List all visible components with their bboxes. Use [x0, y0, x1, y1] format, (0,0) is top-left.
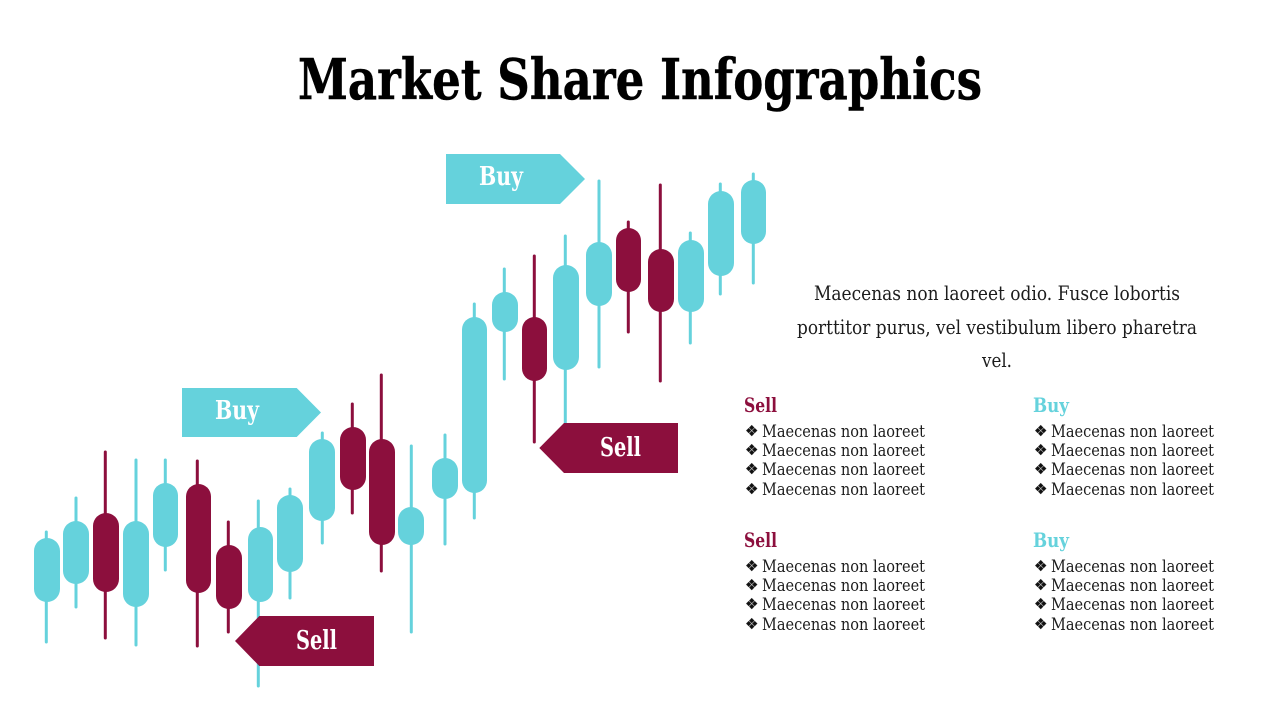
description paragraph	[797, 282, 1197, 372]
list: buy top	[1033, 393, 1214, 500]
list: sell top: Maecenas non laoreet	[762, 460, 925, 480]
description paragraph: vel.	[981, 349, 1012, 372]
candle 16	[492, 269, 518, 379]
list: sell top: Maecenas non laoreet	[762, 441, 925, 461]
candle 18	[553, 236, 579, 430]
list: sell bottom: Maecenas non laoreet	[762, 595, 925, 615]
list: buy bottom: ❖	[1034, 615, 1047, 633]
list: buy bottom	[1033, 528, 1214, 635]
candle 24	[741, 174, 766, 283]
list: buy top: Maecenas non laoreet	[1051, 460, 1214, 480]
candle 10	[309, 433, 335, 543]
list: buy bottom: Maecenas non laoreet	[1051, 557, 1214, 577]
candle 14	[432, 435, 458, 544]
candle 4	[123, 460, 149, 645]
list: buy bottom: ❖	[1034, 557, 1047, 575]
list: buy top: Maecenas non laoreet	[1051, 480, 1214, 500]
candlestick chart	[34, 174, 766, 686]
candle 12	[369, 375, 395, 571]
list: sell bottom	[744, 528, 925, 635]
list: buy bottom: Maecenas non laoreet	[1051, 615, 1214, 635]
description paragraph: Maecenas non laoreet odio. Fusce lobortis	[814, 282, 1180, 305]
list: buy top: Buy	[1033, 393, 1070, 417]
arrow: sell upper: Sell	[600, 433, 641, 463]
arrow: sell lower: Sell	[296, 626, 337, 656]
list: sell bottom: ❖	[745, 595, 758, 613]
list: buy top: Maecenas non laoreet	[1051, 441, 1214, 461]
list: sell top: Sell	[744, 393, 777, 417]
list: sell top: Maecenas non laoreet	[762, 480, 925, 500]
list: sell bottom: Maecenas non laoreet	[762, 557, 925, 577]
candle 6	[186, 461, 211, 646]
list: buy top: ❖	[1034, 422, 1047, 440]
candle 7	[216, 522, 242, 632]
list: buy top: ❖	[1034, 460, 1047, 478]
list: sell top: ❖	[745, 441, 758, 459]
candle 15	[462, 304, 487, 518]
candle 3	[93, 452, 119, 638]
arrow: buy lower: Buy	[215, 396, 260, 426]
title: Market Share Infographics	[298, 47, 982, 113]
list: sell top: ❖	[745, 480, 758, 498]
arrow: sell upper	[539, 423, 678, 473]
candle 2	[63, 498, 89, 607]
list: buy bottom: Maecenas non laoreet	[1051, 576, 1214, 596]
list: buy bottom: ❖	[1034, 595, 1047, 613]
arrow: buy lower	[182, 388, 321, 437]
list: sell bottom: ❖	[745, 557, 758, 575]
candle 5	[153, 460, 178, 570]
list: buy bottom: Buy	[1033, 528, 1070, 552]
candle 22	[678, 233, 704, 343]
list: buy bottom: Maecenas non laoreet	[1051, 595, 1214, 615]
candle 8	[248, 501, 273, 686]
candle 23	[708, 184, 734, 294]
arrow: buy upper	[446, 154, 585, 204]
candle 9	[277, 489, 303, 598]
candle 13	[398, 446, 424, 632]
list: sell top: ❖	[745, 460, 758, 478]
arrow: buy upper: Buy	[479, 162, 524, 192]
candle 21	[648, 185, 674, 381]
list: sell top: ❖	[745, 422, 758, 440]
list: sell bottom: Maecenas non laoreet	[762, 576, 925, 596]
list: buy top: ❖	[1034, 480, 1047, 498]
candle 17	[522, 256, 547, 442]
candle 19	[586, 181, 612, 367]
arrow: sell lower	[235, 616, 374, 666]
list: sell top	[744, 393, 925, 500]
candle 11	[340, 404, 366, 513]
list: sell bottom: ❖	[745, 615, 758, 633]
description paragraph: porttitor purus, vel vestibulum libero pharetra	[797, 316, 1197, 339]
list: buy bottom: ❖	[1034, 576, 1047, 594]
list: sell bottom: Maecenas non laoreet	[762, 615, 925, 635]
list: buy top: Maecenas non laoreet	[1051, 422, 1214, 442]
list: sell bottom: ❖	[745, 576, 758, 594]
list: sell bottom: Sell	[744, 528, 777, 552]
candle 20	[616, 222, 641, 332]
candle 1	[34, 532, 60, 642]
list: sell top: Maecenas non laoreet	[762, 422, 925, 442]
list: buy top: ❖	[1034, 441, 1047, 459]
